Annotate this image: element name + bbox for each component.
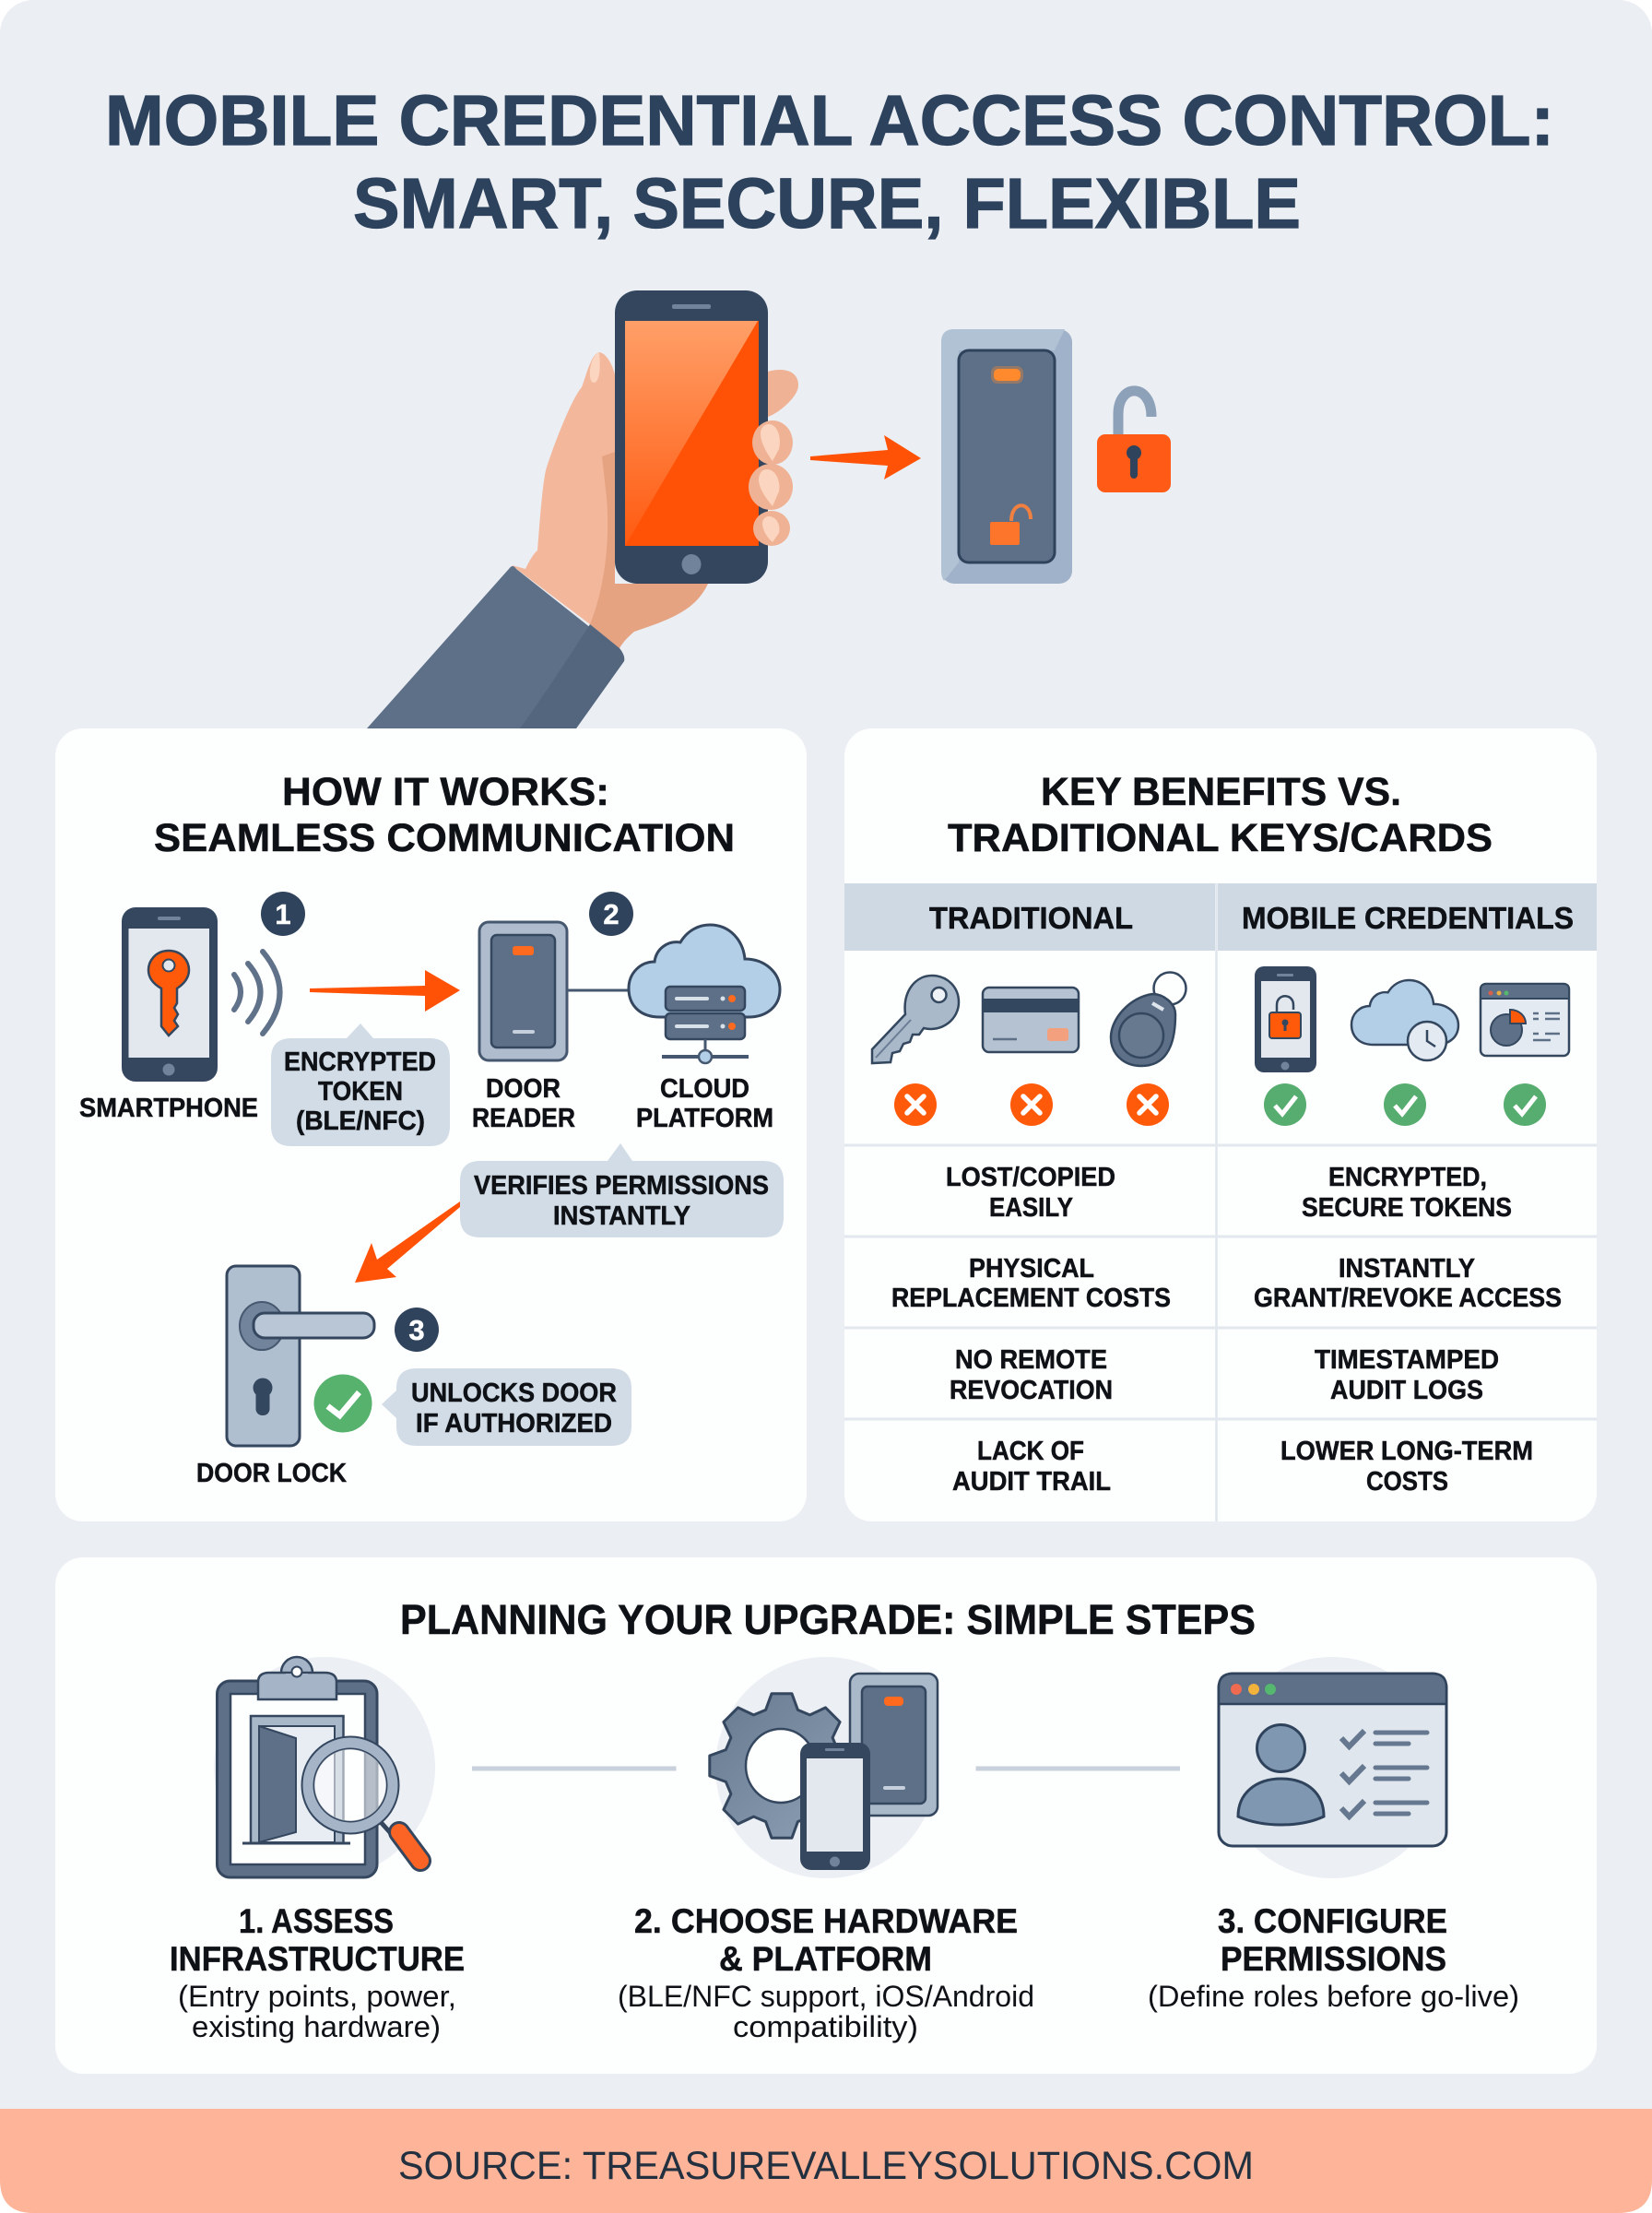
step 2 text: 2. CHOOSE HARDWARE: [634, 1902, 1018, 1940]
icon: cloud with clock: [1351, 980, 1458, 1060]
icon: gear, reader and phone: [710, 1657, 938, 1878]
row 1: [946, 1163, 1512, 1223]
connector: step 2 to 3: [975, 1767, 1180, 1770]
icon: door reader: [479, 922, 567, 1060]
label: cloud platform: PLATFORM: [636, 1104, 773, 1133]
label: door reader: READER: [472, 1104, 575, 1133]
label: cloud platform: CLOUD: [660, 1074, 749, 1104]
title: MOBILE CREDENTIAL ACCESS CONTROL:: [105, 81, 1554, 160]
heading: planning: PLANNING YOUR UPGRADE: SIMPLE STEPS: [400, 1596, 1256, 1643]
footer band with source: [0, 2109, 1652, 2213]
step 3 text: PERMISSIONS: [1221, 1940, 1446, 1978]
connector: reader to cloud: [567, 988, 631, 992]
arrow: cloud to door lock: [355, 1201, 460, 1283]
heading: how it works: SEAMLESS COMMUNICATION: [154, 816, 735, 860]
icon: cloud with servers: [629, 925, 780, 1063]
callout: unlocks door: [382, 1368, 631, 1446]
row 1: LOST/COPIED: [946, 1163, 1115, 1192]
connector: step 1 to 2: [472, 1767, 677, 1770]
callout: verifies permissions: VERIFIES PERMISSIONS: [474, 1171, 769, 1201]
row 3: [950, 1345, 1499, 1405]
icon: metal key: [872, 976, 959, 1063]
step badge 2: 2: [603, 898, 620, 930]
label: door reader: [472, 1074, 575, 1133]
icon: wireless signal waves: [234, 952, 280, 1034]
step 2 text: [618, 1902, 1034, 2043]
icon: door reader: [941, 329, 1072, 584]
heading: key benefits: [948, 770, 1493, 860]
step 1 text: [170, 1902, 465, 2043]
callout: encrypted token: TOKEN: [318, 1077, 403, 1106]
icon: access card: [983, 988, 1079, 1052]
step 1 text: existing hardware): [192, 2010, 441, 2043]
arrow: phone to door reader: [310, 970, 460, 1012]
row 2: [891, 1254, 1562, 1313]
step 3 text: [1148, 1902, 1519, 2013]
row 2: PHYSICAL: [969, 1254, 1094, 1284]
icon: sleeve: [367, 566, 624, 728]
icon: green check: [313, 1374, 372, 1433]
icons: red crosses: [894, 1083, 1169, 1126]
icon: smartphone: [615, 290, 768, 584]
callout: verifies permissions: INSTANTLY: [553, 1201, 690, 1231]
row 4: LOWER LONG-TERM: [1280, 1437, 1533, 1466]
row 3: AUDIT LOGS: [1330, 1376, 1483, 1405]
icon: door lock handle: [227, 1266, 374, 1446]
row 4: LACK OF: [977, 1437, 1084, 1466]
icon: dashboard window: [1481, 984, 1569, 1056]
step 2 text: compatibility): [733, 2010, 918, 2043]
table header: traditional: TRADITIONAL: [929, 901, 1133, 935]
step badge 3: 3: [408, 1314, 425, 1346]
step badge 2: [589, 892, 633, 936]
callout: encrypted token: (BLE/NFC): [296, 1106, 425, 1136]
row 1: EASILY: [989, 1193, 1073, 1223]
label: cloud platform: [636, 1074, 773, 1133]
callout: encrypted token: ENCRYPTED: [284, 1047, 436, 1077]
title: SMART, SECURE, FLEXIBLE: [353, 164, 1301, 243]
hero illustration: hand, phone, reader, lock: [367, 290, 1171, 728]
row 2: REPLACEMENT COSTS: [891, 1284, 1171, 1313]
step 2 text: (BLE/NFC support, iOS/Android: [618, 1980, 1034, 2013]
icon: smartphone with key: [122, 907, 218, 1082]
row 4: [952, 1437, 1533, 1497]
callout: encrypted token: [271, 1024, 450, 1146]
table header: mobile credentials: [1218, 883, 1597, 951]
icon: hand holding phone: [367, 290, 798, 728]
callout: verifies permissions: [460, 1143, 784, 1237]
step 3 text: (Define roles before go-live): [1148, 1980, 1519, 2013]
icon: phone with lock: [1255, 966, 1316, 1072]
row 1: ENCRYPTED,: [1328, 1163, 1487, 1192]
step 1 text: 1. ASSESS: [239, 1902, 394, 1940]
label: smartphone: SMARTPHONE: [79, 1094, 258, 1123]
heading: how it works: HOW IT WORKS:: [282, 770, 609, 814]
step 1 text: INFRASTRUCTURE: [170, 1940, 465, 1978]
row 1: SECURE TOKENS: [1302, 1193, 1512, 1223]
panel: how it works: [55, 728, 807, 1521]
step badge 1: [261, 892, 305, 936]
step badge 1: 1: [275, 898, 291, 930]
row 3: NO REMOTE: [955, 1345, 1107, 1375]
label: door reader: DOOR: [486, 1074, 560, 1104]
panel: planning your upgrade: [55, 1557, 1597, 2074]
heading: key benefits: KEY BENEFITS VS.: [1041, 770, 1401, 814]
row 2: INSTANTLY: [1339, 1254, 1475, 1284]
step badge 3: [395, 1308, 439, 1352]
panel: key benefits comparison: [844, 728, 1597, 1521]
arrow: phone to reader: [810, 435, 921, 479]
label: door lock: DOOR LOCK: [196, 1459, 347, 1488]
table header: traditional: [844, 883, 1215, 951]
heading: how it works: [154, 770, 735, 860]
icon: key fob: [1111, 972, 1186, 1066]
callout: unlocks door: UNLOCKS DOOR: [411, 1379, 617, 1408]
table header: mobile credentials: MOBILE CREDENTIALS: [1242, 901, 1574, 935]
icon: open padlock: [1097, 391, 1171, 492]
icon: clipboard with door and magnifier: [214, 1657, 435, 1878]
row 4: AUDIT TRAIL: [952, 1467, 1111, 1497]
step 3 text: 3. CONFIGURE: [1218, 1902, 1447, 1940]
fingers: [749, 420, 793, 546]
row 3: REVOCATION: [950, 1376, 1113, 1405]
row 2: GRANT/REVOKE ACCESS: [1254, 1284, 1562, 1313]
footer band with source: SOURCE: TREASUREVALLEYSOLUTIONS.COM: [398, 2144, 1254, 2188]
step 1 text: (Entry points, power,: [178, 1980, 456, 2013]
title: [105, 81, 1554, 243]
row 4: COSTS: [1366, 1467, 1448, 1497]
callout: unlocks door: IF AUTHORIZED: [416, 1409, 612, 1438]
row 3: TIMESTAMPED: [1315, 1345, 1499, 1375]
heading: key benefits: TRADITIONAL KEYS/CARDS: [948, 816, 1493, 860]
icon: permissions window: [1219, 1657, 1446, 1878]
step 2 text: & PLATFORM: [719, 1940, 932, 1978]
icons: green checks: [1264, 1083, 1546, 1126]
